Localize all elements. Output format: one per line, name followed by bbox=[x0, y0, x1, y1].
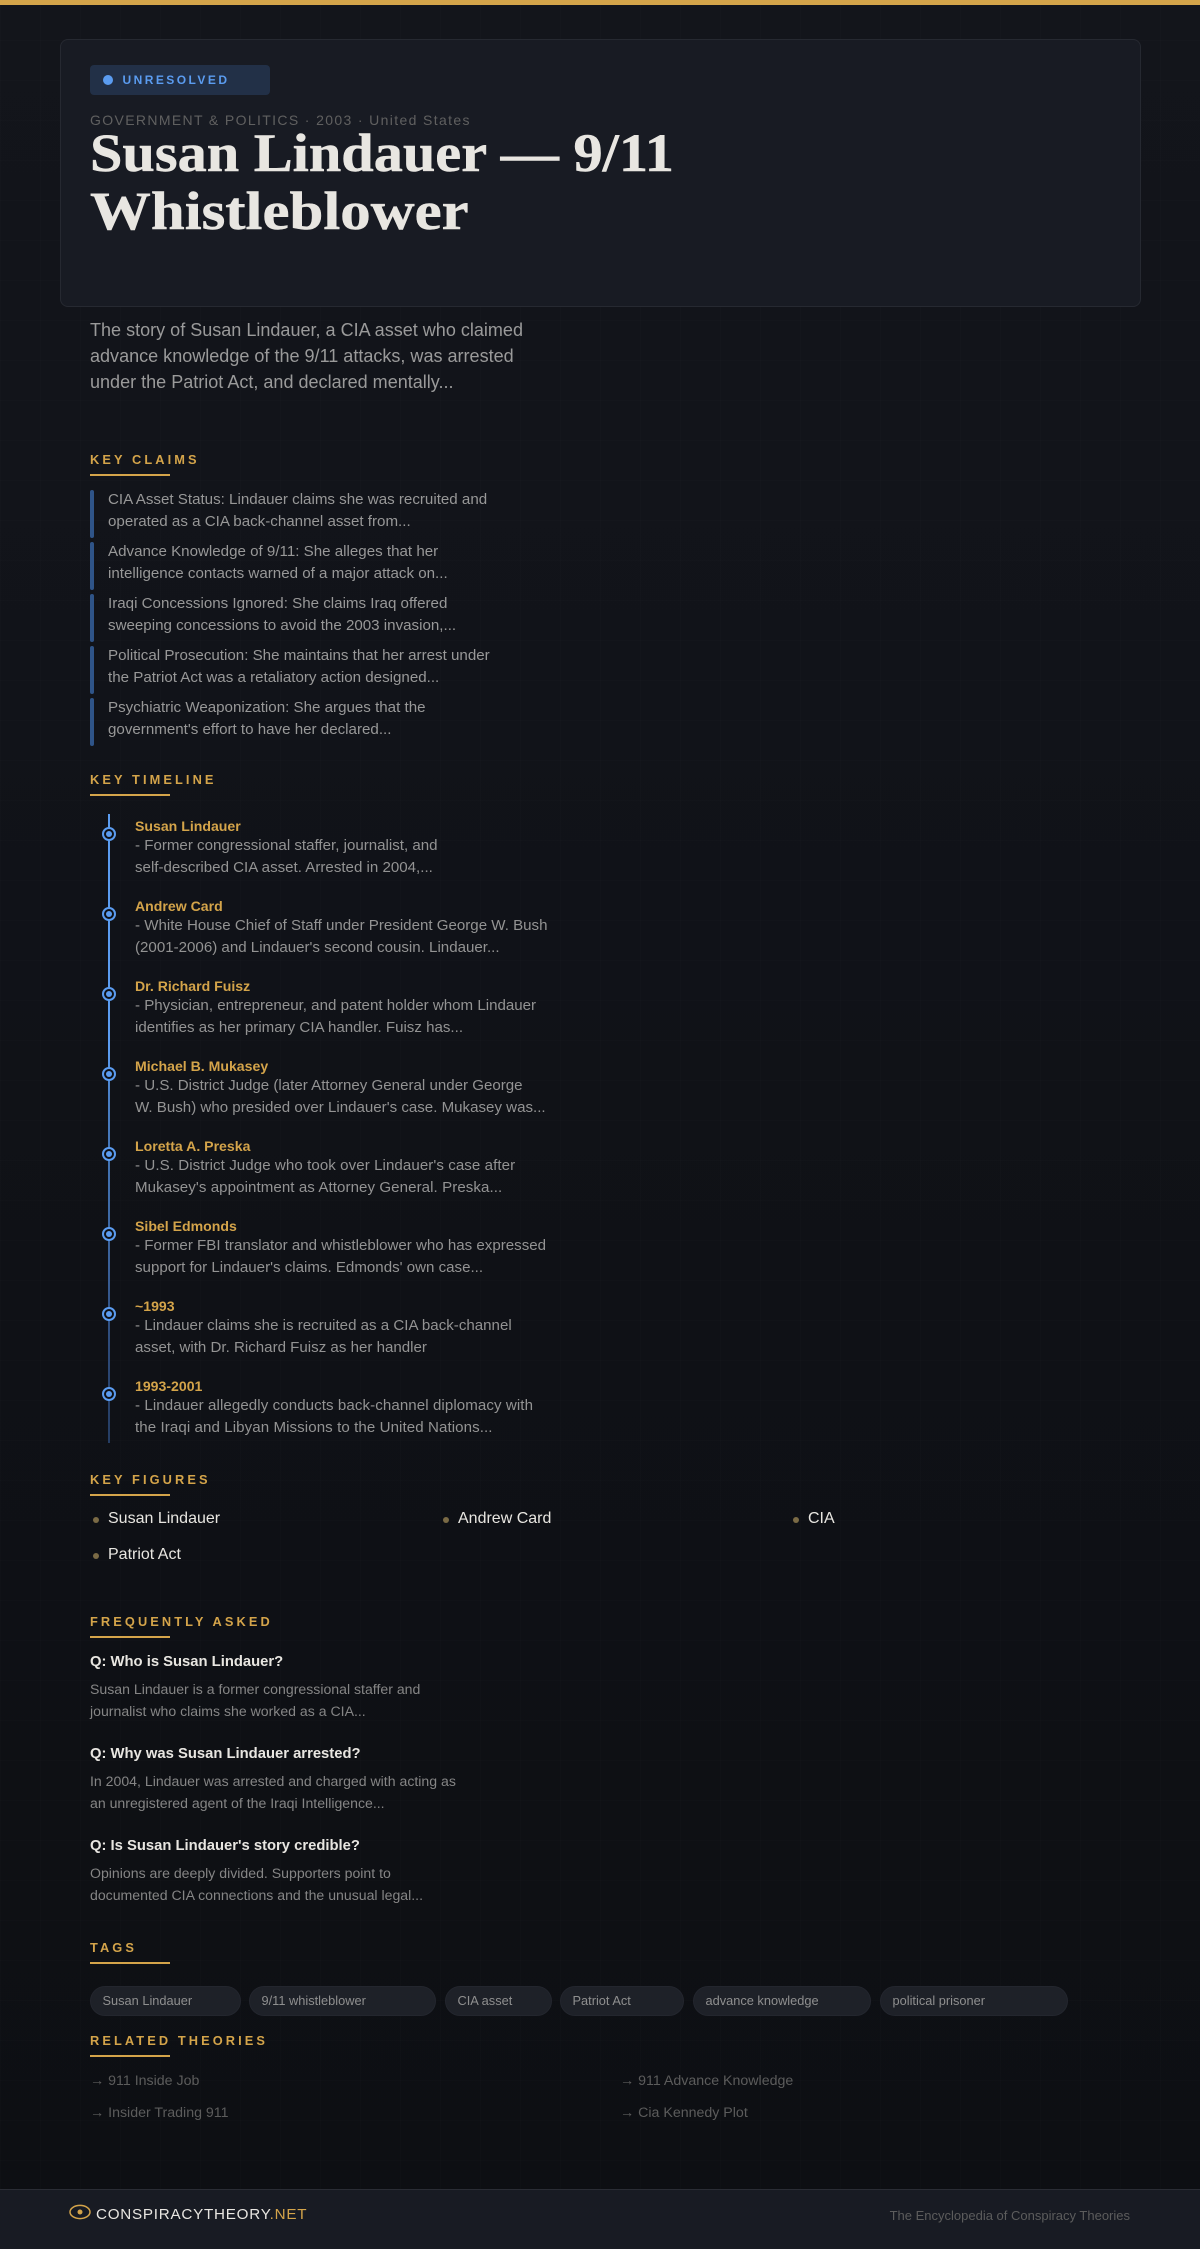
badge label: UNRESOLVED bbox=[122, 73, 229, 87]
entry: ~1993 bbox=[102, 1298, 512, 1356]
tag: 9/11 whistleblower: 9/11 whistleblower bbox=[262, 1993, 366, 2008]
claim 4: the Patriot Act was a retaliatory action designed... bbox=[108, 669, 439, 686]
entry: Susan Lindauer: - Former congressional staffer, journalist, and bbox=[135, 837, 438, 854]
panel: header card bbox=[60, 39, 1141, 307]
timeline axis bbox=[108, 814, 110, 1443]
entry: Susan Lindauer bbox=[102, 818, 438, 876]
claim 1: operated as a CIA back-channel asset from... bbox=[108, 513, 411, 530]
claim 3: Iraqi Concessions Ignored: She claims Iraq offered bbox=[108, 595, 447, 612]
title: Susan Lindauer — 9/11 bbox=[90, 123, 674, 183]
faq 3: Q: Is Susan Lindauer's story credible? bbox=[90, 1838, 360, 1854]
tag: Susan Lindauer bbox=[90, 1986, 241, 2016]
entry: Loretta A. Preska: Mukasey's appointment as Attorney General. Preska... bbox=[135, 1179, 502, 1196]
claim 2: Advance Knowledge of 9/11: She alleges that her bbox=[108, 543, 438, 560]
link: 911 Advance Knowledge: → 911 Advance Knowledge bbox=[620, 2073, 793, 2089]
faq 1: journalist who claims she worked as a CIA... bbox=[90, 1703, 366, 1719]
claim 2: intelligence contacts warned of a major attack on... bbox=[108, 565, 448, 582]
heading: key claims: KEY CLAIMS bbox=[90, 452, 200, 467]
claim 2 bbox=[90, 542, 448, 590]
panel: timeline entries bbox=[102, 818, 548, 1436]
faq 3: Opinions are deeply divided. Supporters point to bbox=[90, 1865, 391, 1881]
top accent bar bbox=[0, 0, 1200, 5]
entry: Michael B. Mukasey: Michael B. Mukasey bbox=[135, 1058, 268, 1074]
tag: advance knowledge: advance knowledge bbox=[706, 1993, 819, 2008]
faq 2: Q: Why was Susan Lindauer arrested? bbox=[90, 1746, 361, 1762]
figure: Susan Lindauer: Susan Lindauer bbox=[108, 1510, 220, 1527]
entry: Susan Lindauer: Susan Lindauer bbox=[135, 818, 241, 834]
entry: Sibel Edmonds: support for Lindauer's claims. Edmonds' own case... bbox=[135, 1259, 483, 1276]
entry: Andrew Card: Andrew Card bbox=[135, 898, 223, 914]
claim 4 bbox=[90, 646, 490, 694]
entry: ~1993: - Lindauer claims she is recruited as a CIA back-channel bbox=[135, 1317, 512, 1334]
tagline: The Encyclopedia of Conspiracy Theories bbox=[890, 2208, 1130, 2223]
panel: related theories links bbox=[90, 2073, 793, 2121]
summary text bbox=[90, 320, 523, 392]
faq 2: In 2004, Lindauer was arrested and charged with acting as bbox=[90, 1773, 456, 1789]
faq 2: an unregistered agent of the Iraqi Intelligence... bbox=[90, 1795, 385, 1811]
tag: 9/11 whistleblower bbox=[249, 1986, 436, 2016]
figure: CIA: CIA bbox=[808, 1510, 835, 1527]
heading: frequently asked: FREQUENTLY ASKED bbox=[90, 1614, 273, 1629]
entry: Andrew Card bbox=[102, 898, 548, 956]
heading: tags: TAGS bbox=[90, 1940, 137, 1955]
tag: CIA asset bbox=[445, 1986, 552, 2016]
entry: Michael B. Mukasey: W. Bush) who presided over Lindauer's case. Mukasey was... bbox=[135, 1099, 546, 1116]
entry: ~1993: ~1993 bbox=[135, 1298, 175, 1314]
faq 1: Susan Lindauer is a former congressional staffer and bbox=[90, 1681, 420, 1697]
claim 1: CIA Asset Status: Lindauer claims she was recruited and bbox=[108, 491, 487, 508]
entry: Dr. Richard Fuisz: identifies as her primary CIA handler. Fuisz has... bbox=[135, 1019, 463, 1036]
entry: Loretta A. Preska: - U.S. District Judge who took over Lindauer's case after bbox=[135, 1157, 515, 1174]
faq 3: documented CIA connections and the unusual legal... bbox=[90, 1887, 423, 1903]
faq 1 bbox=[90, 1654, 420, 1719]
heading: key figures: KEY FIGURES bbox=[90, 1472, 211, 1487]
entry: Michael B. Mukasey: - U.S. District Judge (later Attorney General under George bbox=[135, 1077, 523, 1094]
figure: Patriot Act: Patriot Act bbox=[108, 1546, 181, 1563]
entry: Dr. Richard Fuisz bbox=[102, 978, 536, 1036]
faq 2 bbox=[90, 1746, 456, 1811]
panel: FAQ list bbox=[90, 1654, 456, 1903]
summary text: The story of Susan Lindauer, a CIA asset who claimed bbox=[90, 320, 523, 340]
category meta line: GOVERNMENT & POLITICS · 2003 · United States bbox=[90, 112, 471, 128]
entry: 1993-2001: the Iraqi and Libyan Missions to the United Nations... bbox=[135, 1419, 493, 1436]
entry: Dr. Richard Fuisz: - Physician, entrepreneur, and patent holder whom Lindauer bbox=[135, 997, 536, 1014]
entry: Sibel Edmonds: - Former FBI translator and whistleblower who has expressed bbox=[135, 1237, 546, 1254]
figure: Andrew Card: Andrew Card bbox=[458, 1510, 551, 1527]
summary text: under the Patriot Act, and declared mentally... bbox=[90, 372, 454, 392]
panel: key claims list bbox=[90, 490, 490, 746]
link: Insider Trading 911: → Insider Trading 911 bbox=[90, 2105, 229, 2121]
faq 3 bbox=[90, 1838, 423, 1903]
entry: Andrew Card: (2001-2006) and Lindauer's second cousin. Lindauer... bbox=[135, 939, 500, 956]
tag: Susan Lindauer: Susan Lindauer bbox=[102, 1993, 192, 2008]
title bbox=[90, 123, 674, 241]
tag: Patriot Act: Patriot Act bbox=[572, 1993, 631, 2008]
faq 1: Q: Who is Susan Lindauer? bbox=[90, 1654, 283, 1670]
panel: key figures grid bbox=[93, 1510, 835, 1563]
claim 1 bbox=[90, 490, 487, 538]
entry: Loretta A. Preska: Loretta A. Preska bbox=[135, 1138, 250, 1154]
entry: Andrew Card: - White House Chief of Staff under President George W. Bush bbox=[135, 917, 548, 934]
status badge bbox=[90, 65, 270, 95]
badge dot bbox=[103, 75, 113, 85]
entry: Sibel Edmonds: Sibel Edmonds bbox=[135, 1218, 237, 1234]
claim 3: sweeping concessions to avoid the 2003 invasion,... bbox=[108, 617, 456, 634]
claim 4: Political Prosecution: She maintains that her arrest under bbox=[108, 647, 490, 664]
tag: Patriot Act bbox=[560, 1986, 684, 2016]
link: Cia Kennedy Plot: → Cia Kennedy Plot bbox=[620, 2105, 748, 2121]
claim 5: Psychiatric Weaponization: She argues that the bbox=[108, 699, 426, 716]
link: 911 Inside Job: → 911 Inside Job bbox=[90, 2073, 199, 2089]
panel: tag pills bbox=[90, 1986, 1068, 2016]
summary text: advance knowledge of the 9/11 attacks, was arrested bbox=[90, 346, 514, 366]
heading: related theories: RELATED THEORIES bbox=[90, 2033, 268, 2048]
tag: political prisoner: political prisoner bbox=[892, 1993, 985, 2008]
entry: ~1993: asset, with Dr. Richard Fuisz as her handler bbox=[135, 1339, 427, 1356]
claim 5: government's effort to have her declared... bbox=[108, 721, 391, 738]
entry: Dr. Richard Fuisz: Dr. Richard Fuisz bbox=[135, 978, 250, 994]
entry: Susan Lindauer: self-described CIA asset. Arrested in 2004,... bbox=[135, 859, 433, 876]
site name: CONSPIRACYTHEORY.NET bbox=[96, 2206, 307, 2223]
claim 3 bbox=[90, 594, 456, 642]
entry: Loretta A. Preska bbox=[102, 1138, 515, 1196]
entry: 1993-2001: 1993-2001 bbox=[135, 1378, 202, 1394]
entry: Sibel Edmonds bbox=[102, 1218, 546, 1276]
icon: eye logo bbox=[69, 2204, 91, 2220]
heading: key timeline: KEY TIMELINE bbox=[90, 772, 217, 787]
tag: CIA asset: CIA asset bbox=[458, 1993, 512, 2008]
entry: 1993-2001 bbox=[102, 1378, 533, 1436]
entry: Michael B. Mukasey bbox=[102, 1058, 546, 1116]
title: Whistleblower bbox=[90, 181, 469, 241]
entry: 1993-2001: - Lindauer allegedly conducts back-channel diplomacy with bbox=[135, 1397, 533, 1414]
tag: political prisoner bbox=[880, 1986, 1068, 2016]
figure: CIA bbox=[793, 1510, 835, 1527]
claim 5 bbox=[90, 698, 426, 746]
tag: advance knowledge bbox=[693, 1986, 871, 2016]
footer bbox=[0, 2189, 1200, 2249]
